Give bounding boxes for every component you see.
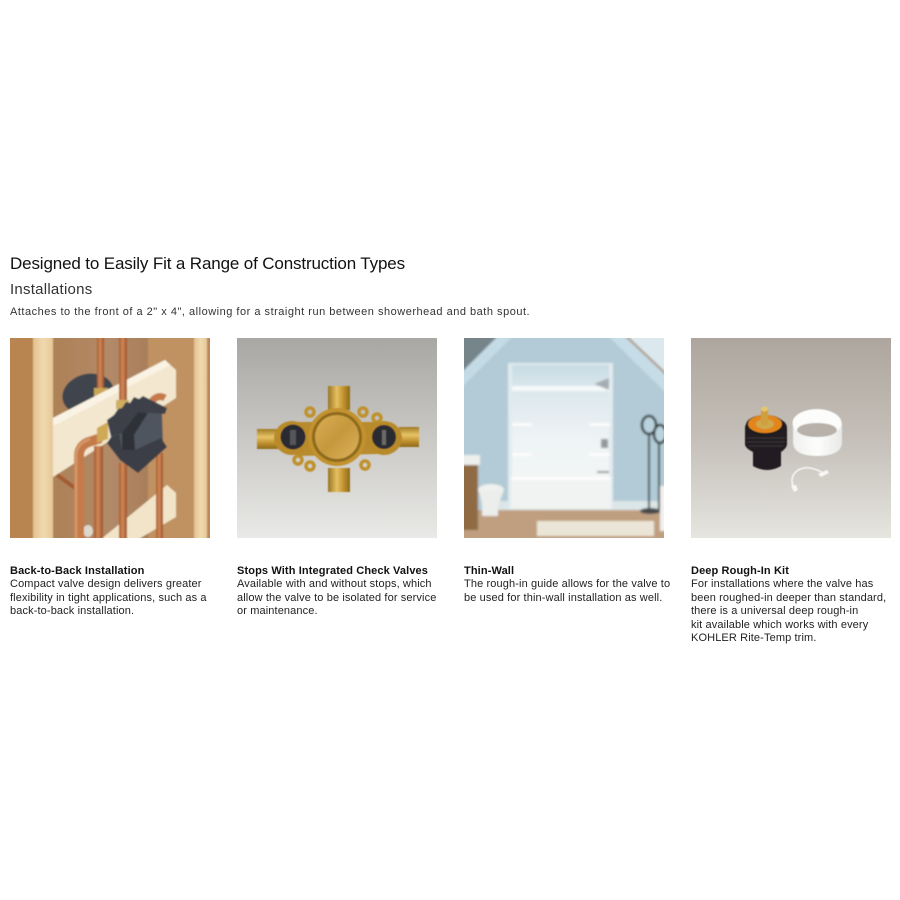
caption: thin-wall: The rough-in guide allows for the valve to [464, 578, 670, 590]
caption: deep rough-in kit: For installations where the valve has [691, 578, 873, 590]
caption: stops with integrated check valves: allow the valve to be isolated for service [237, 592, 436, 604]
panel: back-to-back installation photo [10, 338, 210, 538]
title: Designed to Easily Fit a Range of Construction Types [10, 254, 405, 273]
caption: deep rough-in kit: there is a universal deep rough-in [691, 605, 858, 617]
caption: stops with integrated check valves [237, 565, 436, 617]
caption: deep rough-in kit: KOHLER Rite-Temp trim. [691, 632, 816, 644]
caption: thin-wall [464, 565, 670, 604]
caption: back-to-back installation: back-to-back installation. [10, 605, 134, 617]
panel: deep rough-in kit photo [691, 338, 891, 538]
caption: back-to-back installation: Compact valve design delivers greater [10, 578, 202, 590]
caption: thin-wall: be used for thin-wall installation as well. [464, 592, 662, 604]
subtitle: Installations [10, 281, 92, 298]
caption: thin-wall: Thin-Wall [464, 565, 514, 577]
caption: back-to-back installation: Back-to-Back Installation [10, 565, 144, 577]
caption: stops with integrated check valves: or maintenance. [237, 605, 318, 617]
intro text: Attaches to the front of a 2" x 4", allowing for a straight run between showerhead and bath spout. [10, 306, 530, 318]
caption: back-to-back installation: flexibility in tight applications, such as a [10, 592, 207, 604]
caption: deep rough-in kit: been roughed-in deeper than standard, [691, 592, 886, 604]
panel: thin-wall bathroom photo [464, 338, 664, 538]
caption: back-to-back installation [10, 565, 207, 617]
caption: deep rough-in kit: Deep Rough-In Kit [691, 565, 789, 577]
caption: deep rough-in kit: kit available which works with every [691, 619, 868, 631]
panel: valve with stops photo [237, 338, 437, 538]
caption: stops with integrated check valves: Available with and without stops, which [237, 578, 432, 590]
caption: stops with integrated check valves: Stops With Integrated Check Valves [237, 565, 428, 577]
caption: deep rough-in kit [691, 565, 886, 644]
